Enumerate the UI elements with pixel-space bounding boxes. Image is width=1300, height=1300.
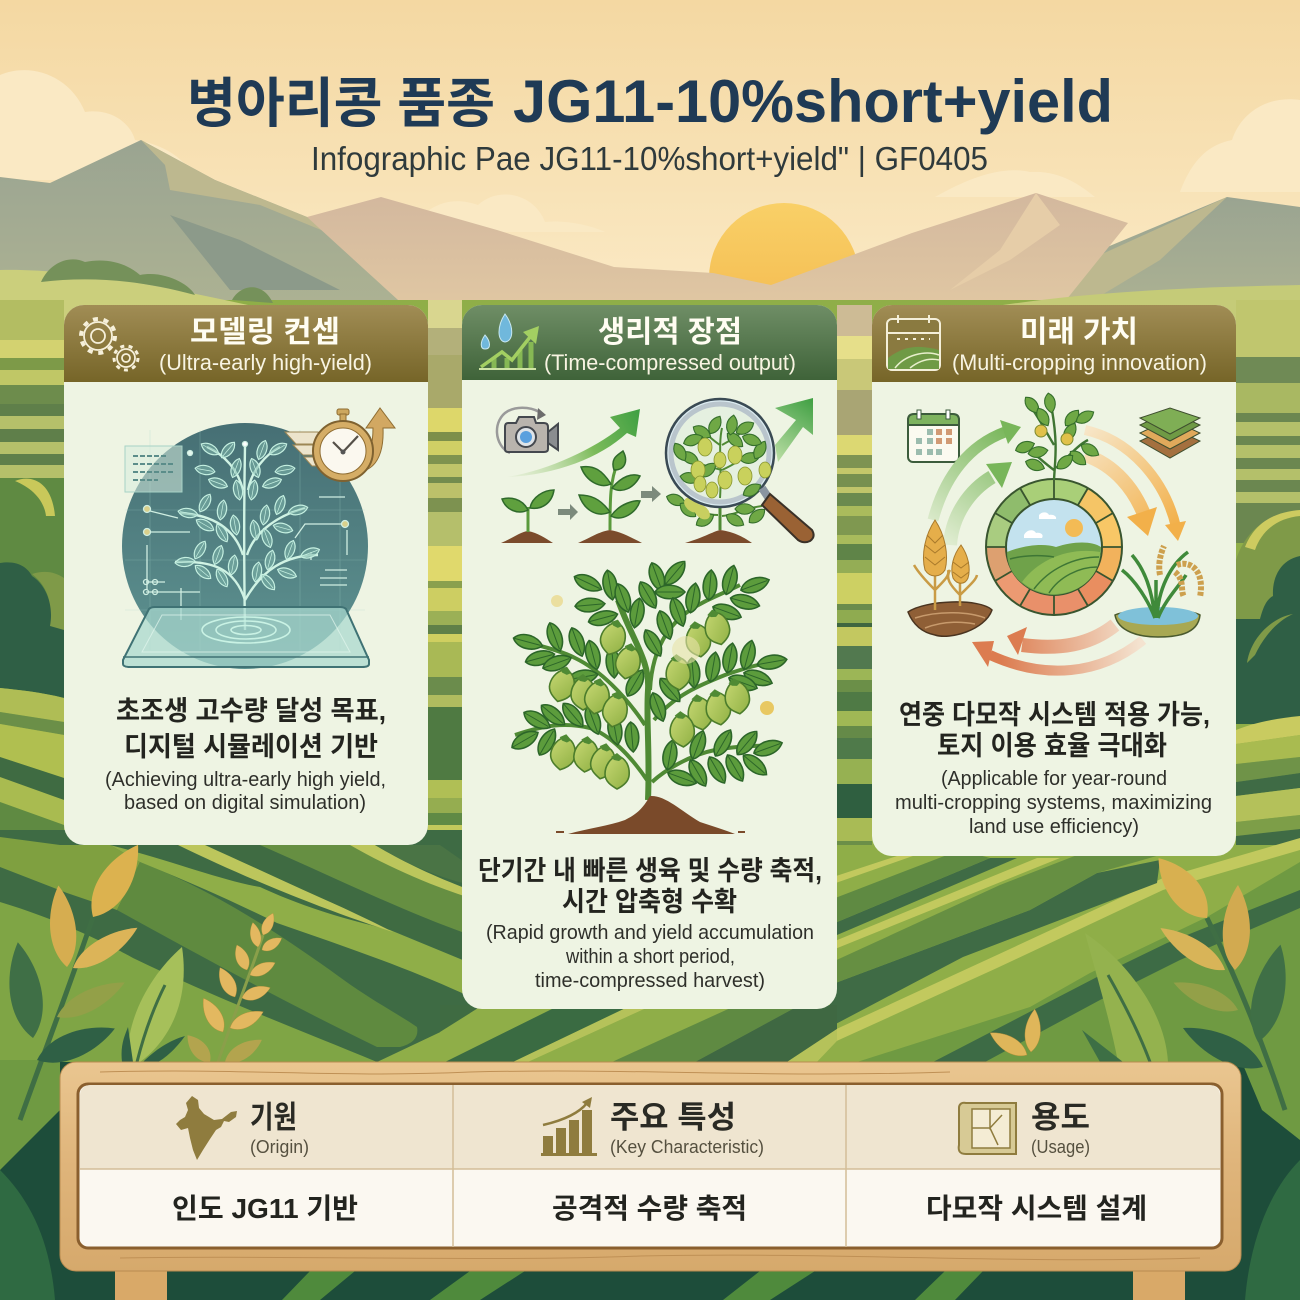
- arrow: red outer: [972, 640, 1143, 671]
- icon: winged stopwatch with arrow: [285, 408, 395, 481]
- column: key characteristic: (Key Characteristic): [610, 1137, 764, 1157]
- icon: field layers: [1140, 408, 1200, 458]
- panel header: physiological advantage: [462, 305, 837, 380]
- main chickpea plant with pods: [509, 557, 788, 834]
- column: origin: (Origin): [250, 1137, 309, 1157]
- panel: future value: [872, 305, 1236, 856]
- column: origin: 기원: [250, 1100, 297, 1135]
- circuit lines: [144, 442, 348, 620]
- wooden sign table: [60, 1062, 1241, 1300]
- text: physiological advantage description: [478, 856, 822, 992]
- text: physiological advantage description: (Rapid growth and yield accumulation: [486, 922, 814, 944]
- arrow: orange inner: [1085, 455, 1157, 536]
- background: clouds: [0, 70, 1300, 232]
- background: gap terraces between panels: [428, 300, 872, 864]
- text: modeling concept description: [105, 696, 386, 814]
- text: future value description: 토지 이용 효율 극대화: [937, 731, 1167, 761]
- subtitle: Infographic Pae JG11-10%short+yield" | GF0405: [311, 140, 988, 177]
- text: future value description: (Applicable for year-round: [941, 768, 1167, 790]
- panel header: modeling concept: (Ultra-early high-yield): [159, 350, 372, 375]
- foreground green leaf right: [1085, 933, 1168, 1062]
- icon: time-lapse camera: [497, 408, 558, 453]
- text: physiological advantage description: within a short period,: [565, 946, 735, 968]
- text: physiological advantage description: 시간 압축형 수확: [562, 887, 737, 917]
- background: bottom centre diagonal fields: [440, 1005, 837, 1062]
- growth stage 2: young plant: [578, 451, 642, 543]
- text: future value description: multi-cropping systems, maximizing: [895, 792, 1212, 814]
- rice in water: [1115, 546, 1201, 637]
- icon: gears: [81, 319, 138, 370]
- column: usage: 용도: [1031, 1100, 1090, 1135]
- text: physiological advantage description: time-compressed harvest): [535, 970, 765, 992]
- growth stage 3: plant under magnifier: [665, 399, 814, 543]
- arrow: red inner: [1007, 625, 1115, 655]
- crop rotation ring: [975, 468, 1133, 626]
- panel header: modeling concept: 모델링 컨셉: [190, 316, 340, 349]
- foreground small gold sprig right: [986, 1008, 1042, 1062]
- text: future value description: [895, 700, 1212, 838]
- panel: physiological advantage: [462, 305, 837, 1009]
- text: modeling concept description: 디지털 시뮬레이션 기반: [124, 732, 378, 762]
- illustration: digital plant simulation: [122, 408, 395, 669]
- icon: India map: [176, 1096, 237, 1160]
- column: origin: [172, 1096, 358, 1224]
- background: dark ground behind sign: [0, 1060, 1300, 1300]
- text: modeling concept description: (Achieving ultra-early high yield,: [105, 769, 386, 791]
- column: usage: 다모작 시스템 설계: [926, 1193, 1147, 1224]
- background: lower right diagonal fields: [830, 838, 1300, 1062]
- column: usage: (Usage): [1031, 1137, 1090, 1157]
- column: key characteristic: 주요 특성: [610, 1100, 736, 1135]
- background: field base and hills: [0, 259, 1300, 1070]
- arrow: green upward: [775, 398, 813, 462]
- column: origin: 인도 JG11 기반: [172, 1193, 358, 1224]
- title: 병아리콩 품종: [187, 74, 495, 134]
- growth stage 1: seedling: [501, 490, 554, 543]
- panel header: physiological advantage: 생리적 장점: [598, 316, 742, 349]
- background: left margin terraces: [0, 300, 64, 860]
- sign posts: [115, 1268, 1185, 1300]
- background: lower left diagonal fields: [0, 830, 470, 1062]
- text: physiological advantage description: 단기간 내 빠른 생육 및 수량 축적,: [478, 856, 822, 886]
- column: key characteristic: 공격적 수량 축적: [552, 1193, 747, 1224]
- background: mountains: [0, 140, 1300, 320]
- title: JG11-10%short+yield: [513, 68, 1113, 135]
- tablet: [123, 607, 369, 667]
- icon: calendar field: [887, 315, 940, 370]
- panel header: future value: (Multi-cropping innovation): [952, 350, 1207, 375]
- chickpea sprig: [1014, 392, 1101, 480]
- foreground green leaf left: [128, 947, 184, 1062]
- panel: modeling concept: [64, 305, 428, 845]
- arrow: growth curve: [507, 409, 640, 477]
- panel header: physiological advantage: (Time-compressed output): [544, 350, 796, 375]
- glowing plant: [175, 439, 321, 630]
- background: sky: [0, 0, 1300, 330]
- foreground gold sprig: [182, 911, 284, 1069]
- background: setting sun: [709, 203, 859, 353]
- table header row: [80, 1085, 1220, 1169]
- icon: map scroll: [959, 1103, 1016, 1154]
- text: future value description: 연중 다모작 시스템 적용 가능,: [899, 700, 1210, 730]
- data card: [125, 446, 182, 492]
- column: usage: [926, 1100, 1147, 1224]
- column: key characteristic: [541, 1097, 764, 1224]
- text: future value description: land use efficiency): [969, 816, 1139, 838]
- panel header: modeling concept: [64, 305, 428, 382]
- arrow: orange outer: [1085, 430, 1186, 541]
- panel header: future value: 미래 가치: [1020, 316, 1138, 349]
- arrow: stage step 1: [558, 504, 578, 520]
- foreground plant left: [2, 837, 185, 1120]
- text: modeling concept description: based on digital simulation): [124, 792, 366, 814]
- icon: water drops and growth chart: [479, 314, 539, 369]
- icon: rising bar chart: [541, 1097, 597, 1156]
- arrow: stage step 2: [641, 486, 661, 502]
- arrow: green inner: [950, 462, 1012, 545]
- wheat on soil: [908, 520, 992, 636]
- icon: magnifying glass: [666, 399, 814, 542]
- table body: [78, 1084, 1222, 1248]
- panel header: future value: [872, 305, 1236, 382]
- cycle arrows: [933, 420, 1186, 671]
- icon: planting calendar: [908, 410, 959, 462]
- arrow: green outer: [933, 420, 1021, 520]
- foreground plant right: [986, 848, 1295, 1110]
- text: modeling concept description: 초조생 고수량 달성 목표,: [116, 696, 386, 726]
- title: [187, 68, 1113, 135]
- wood frame: [60, 1062, 1241, 1271]
- background: right margin terraces: [1236, 300, 1300, 850]
